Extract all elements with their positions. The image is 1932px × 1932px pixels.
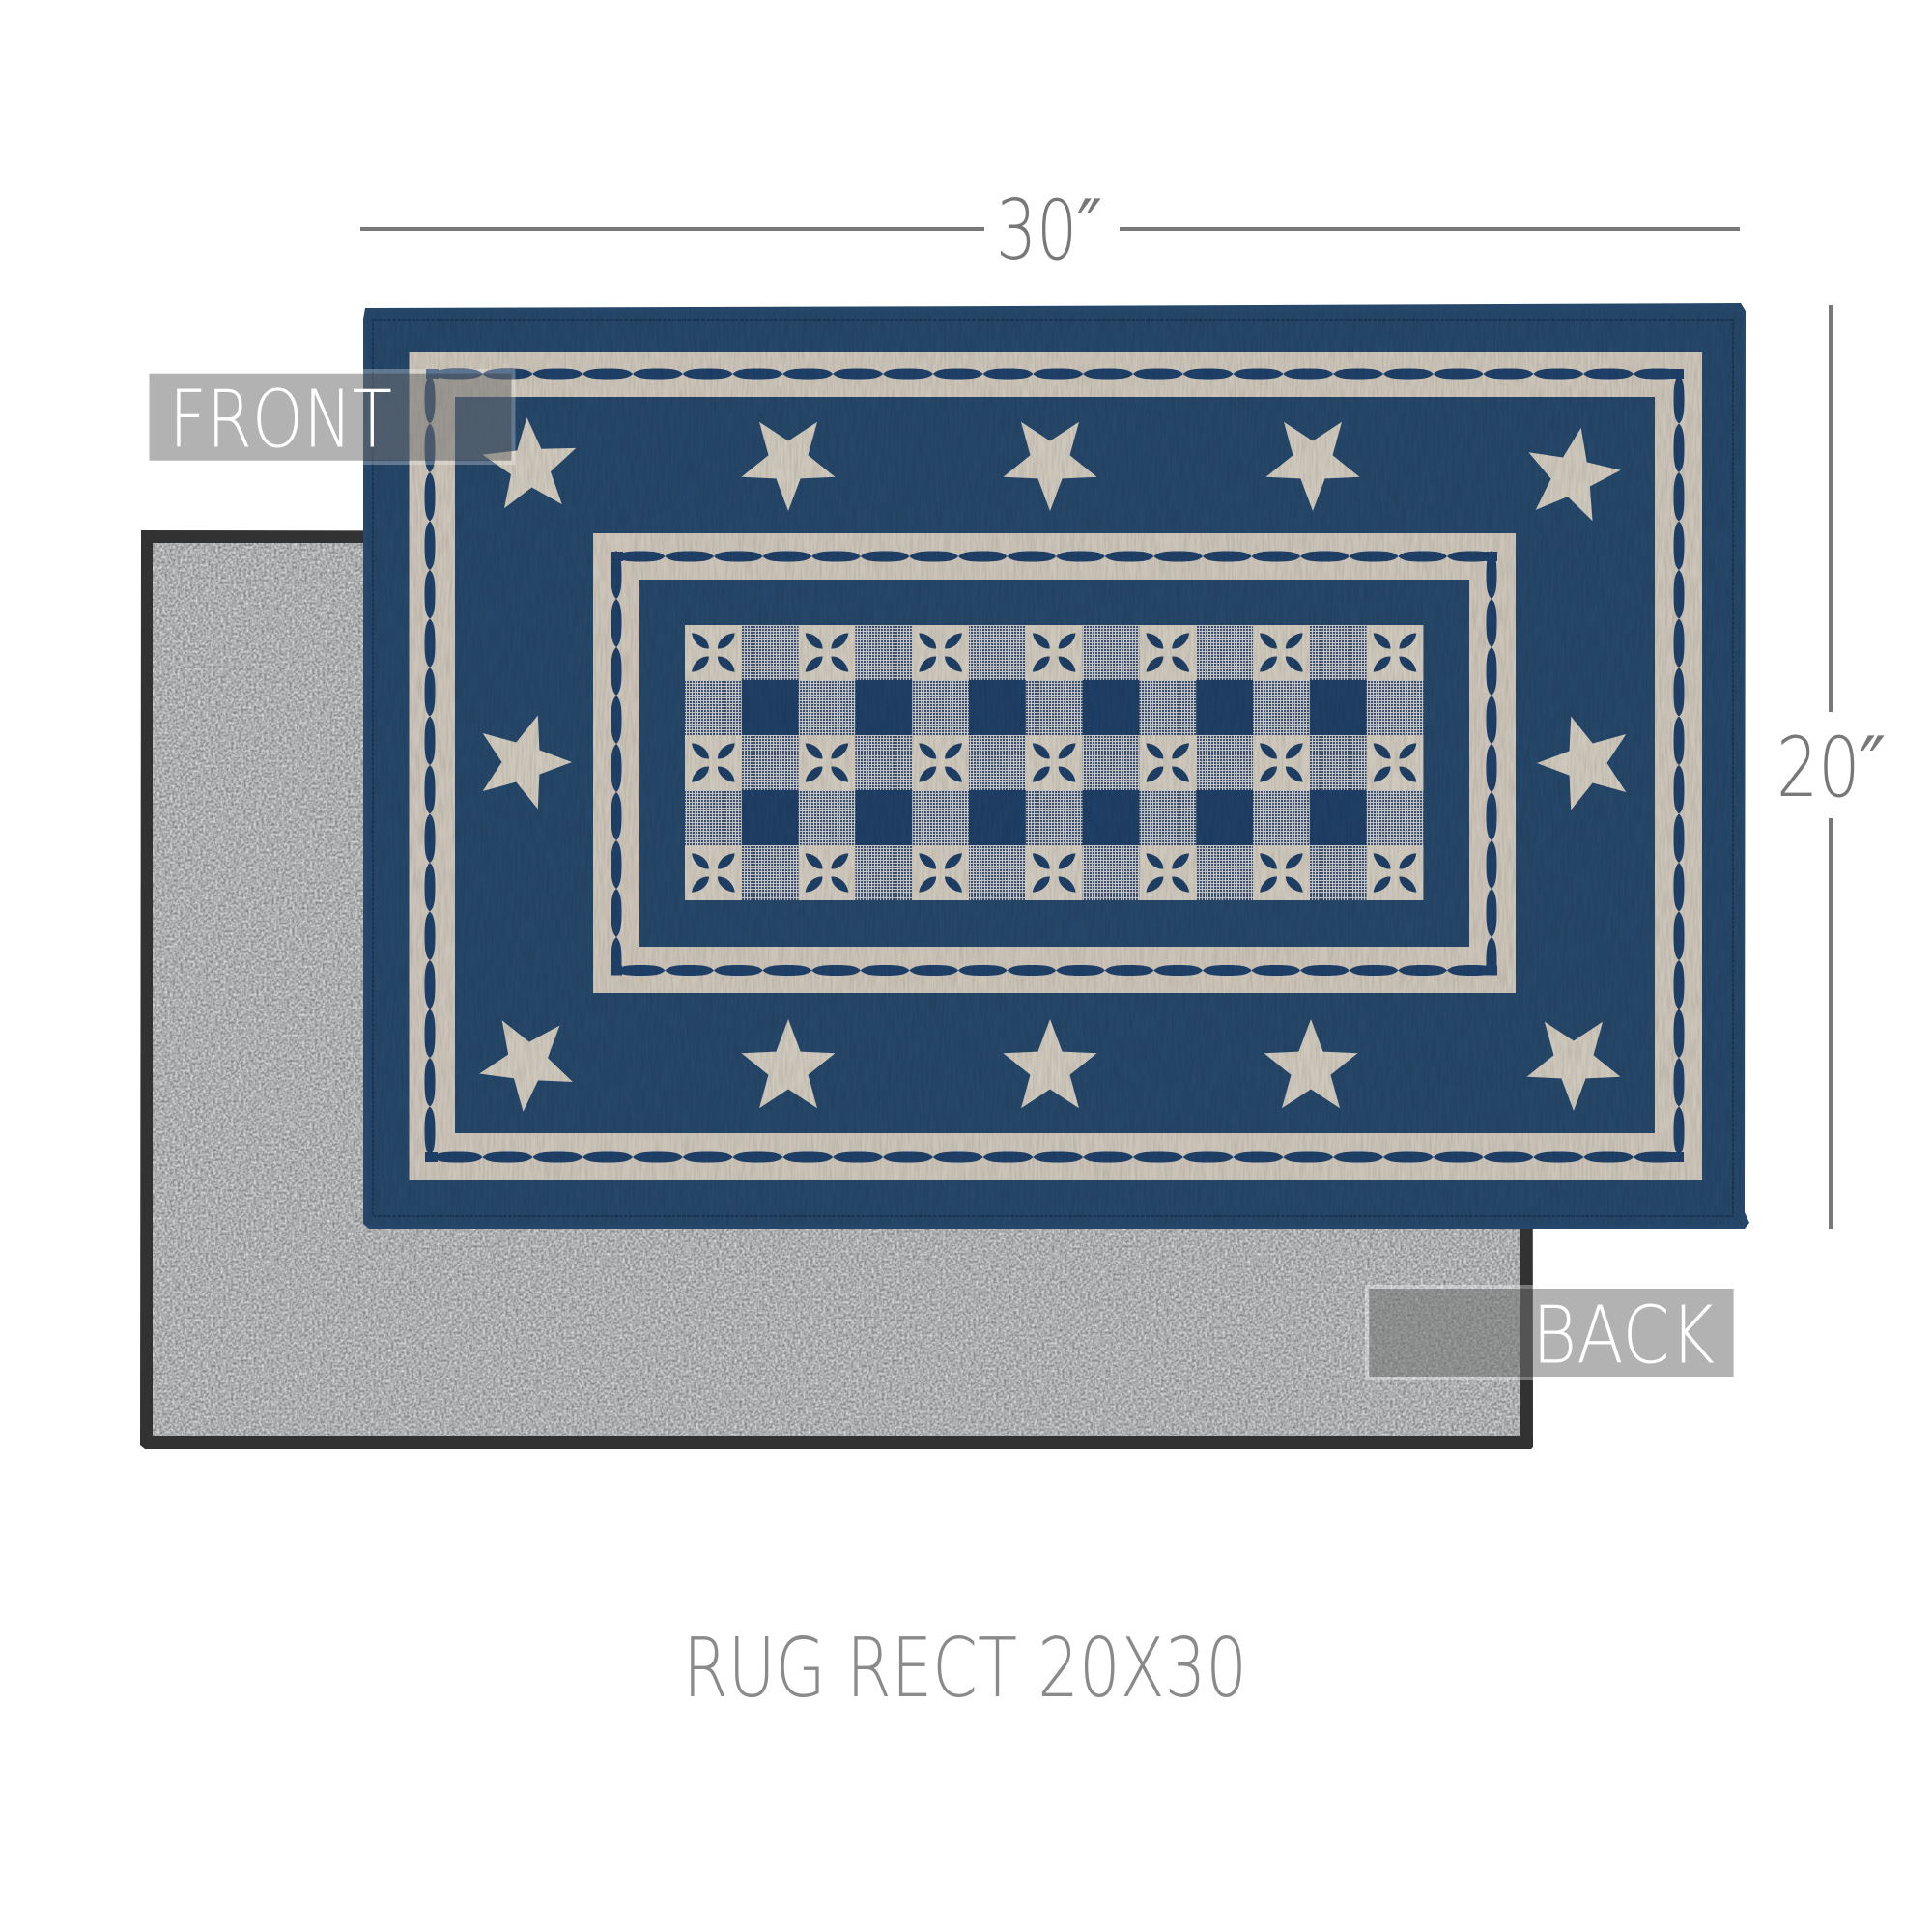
back label halo <box>1365 1285 1533 1380</box>
gingham check panel <box>685 625 1423 900</box>
stars <box>476 414 1627 1116</box>
back rug knit surface <box>153 543 1520 1436</box>
width line right <box>1120 227 1740 231</box>
FRONT label <box>149 369 516 467</box>
width value: 30″ <box>996 183 1101 279</box>
BACK label <box>1365 1285 1734 1381</box>
rug weave texture <box>367 311 1743 1225</box>
outer cream frame <box>410 352 1702 1180</box>
inner bead border <box>610 550 1498 978</box>
outer bead border <box>423 367 1686 1164</box>
height dimension <box>1776 305 1885 1229</box>
back label text: BACK <box>1532 1291 1715 1381</box>
rug base <box>363 303 1749 1229</box>
front label box <box>149 374 512 461</box>
title: RUG RECT 20X30 <box>683 1621 1247 1717</box>
inner cream frame <box>593 533 1516 993</box>
height line top <box>1829 305 1833 712</box>
width dimension <box>360 183 1740 279</box>
height value: 20″ <box>1776 720 1885 816</box>
back rug binding <box>140 530 1533 1449</box>
front rug <box>363 303 1749 1229</box>
width line left <box>360 227 984 231</box>
back rug <box>140 530 1533 1449</box>
back label box <box>1369 1289 1734 1377</box>
front label text: FRONT <box>169 375 392 467</box>
height line bottom <box>1829 818 1833 1229</box>
rug stitching <box>373 320 1733 1216</box>
front label halo <box>149 369 516 465</box>
